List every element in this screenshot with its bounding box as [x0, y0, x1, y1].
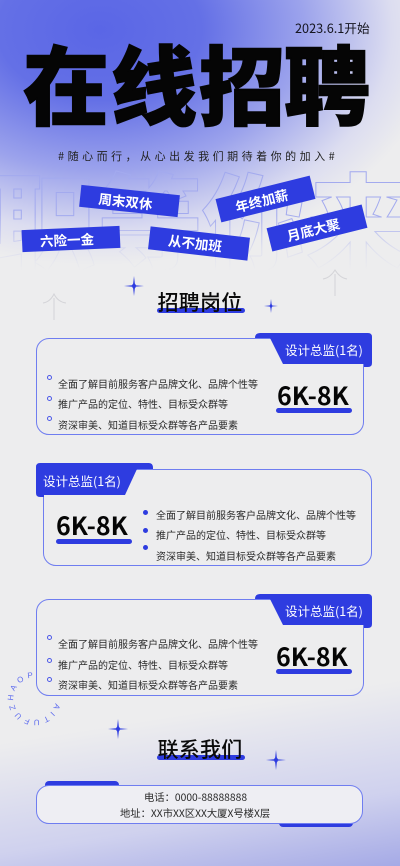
circular text: AITUFUZHAOP: [8, 672, 60, 726]
address: 地址：XX市XX区XX大厦X号楼X层: [120, 805, 270, 820]
duty bullets and text: [47, 375, 52, 380]
panel: job 3: 资深审美、知道目标受众群等各产品要素: [58, 677, 238, 692]
bottom tab: [279, 819, 353, 827]
job tab: [36, 463, 153, 497]
tag: insurance: 六险一金: [40, 228, 94, 250]
contact frame: [36, 785, 363, 824]
icon: star: [264, 299, 278, 313]
tag: year-end bonus: 年终加薪: [233, 184, 290, 216]
tag: year-end bonus: [216, 176, 315, 222]
heading underline: [157, 308, 245, 313]
title: 招: [199, 18, 285, 143]
tag: monthly gathering: [267, 205, 367, 251]
slogan: #随心而行，从心出发我们期待着你的加入#: [58, 148, 338, 164]
job tab: [255, 333, 372, 367]
panel: job 2: 全面了解目前服务客户品牌文化、品牌个性等: [156, 507, 356, 522]
salary: 6K-8K: [276, 638, 348, 674]
panel: job 1: [36, 333, 372, 435]
job title: 设计总监(1名): [43, 471, 121, 490]
date: 2023.6.1开始: [295, 18, 370, 37]
duty bullets and text: [143, 510, 148, 515]
title: 在: [23, 18, 109, 143]
icon: star: [108, 719, 128, 739]
tag: no overtime: [148, 226, 250, 261]
decorative faint arrows: [43, 270, 347, 320]
panel: job 3: [36, 594, 372, 696]
salary underline: [276, 669, 352, 674]
job tab: [255, 594, 372, 628]
panel: job 2: [36, 463, 372, 566]
phone: 电话：0000-88888888: [144, 789, 247, 804]
panel: job 1: 推广产品的定位、特性、目标受众群等: [58, 396, 228, 411]
top tab: [45, 781, 119, 789]
panel: contact: [36, 781, 363, 827]
panel: job 2: 资深审美、知道目标受众群等各产品要素: [156, 548, 336, 563]
card frame: [43, 469, 372, 566]
salary: 6K-8K: [277, 377, 349, 413]
tag: no overtime: 从不加班: [167, 230, 223, 256]
tag: weekend: 周末双休: [98, 188, 153, 213]
job title: 设计总监(1名): [285, 340, 363, 359]
panel: job 1: 全面了解目前服务客户品牌文化、品牌个性等: [58, 376, 258, 391]
ghost outlined text: [0, 171, 400, 259]
icon: star: [124, 276, 144, 296]
card frame: [36, 599, 364, 696]
card frame: [36, 338, 364, 435]
tag: weekend: [79, 185, 180, 217]
heading underline: [157, 755, 245, 760]
panel: job 2: 推广产品的定位、特性、目标受众群等: [156, 527, 326, 542]
title: 聘: [284, 18, 370, 143]
heading: contact: 联系我们: [158, 734, 242, 764]
panel: job 3: 全面了解目前服务客户品牌文化、品牌个性等: [58, 636, 258, 651]
panel: job 1: 资深审美、知道目标受众群等各产品要素: [58, 417, 238, 432]
job title: 设计总监(1名): [285, 601, 363, 620]
icon: star: [266, 750, 286, 770]
tag: insurance: [22, 226, 120, 252]
title: [23, 18, 370, 143]
title: 线: [111, 18, 197, 143]
salary underline: [56, 539, 132, 544]
panel: job 3: 推广产品的定位、特性、目标受众群等: [58, 657, 228, 672]
duty bullets and text: [47, 635, 52, 640]
salary underline: [276, 408, 352, 413]
heading: positions: 招聘岗位: [158, 287, 242, 317]
tag: monthly gathering: 月底大聚: [285, 213, 342, 245]
salary: 6K-8K: [56, 507, 128, 543]
